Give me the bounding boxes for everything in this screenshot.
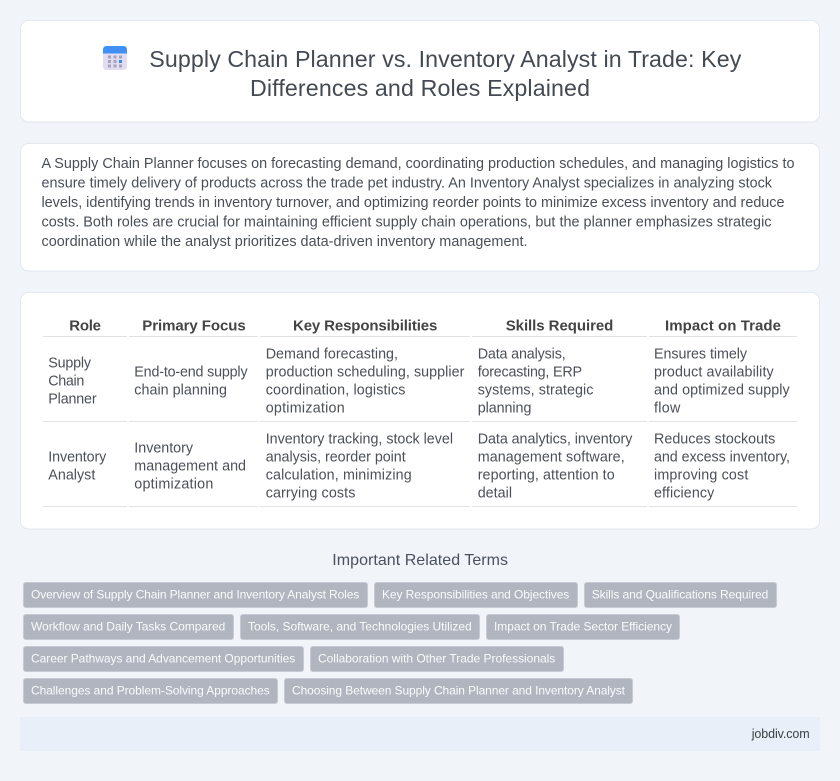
text block: summary: [42, 156, 794, 250]
panel: header: [20, 20, 820, 122]
table row: Inventory Analyst: management and: [134, 458, 246, 474]
table row: Supply Chain Planner: and optimized supply: [654, 382, 791, 398]
table row: Inventory Analyst: calculation, minimizing: [266, 467, 412, 483]
icon: calendar: [103, 46, 127, 70]
table row: Inventory Analyst: optimization: [134, 476, 213, 492]
table row: Supply Chain Planner: Ensures timely: [654, 346, 748, 362]
table row: Supply Chain Planner: product availability: [654, 364, 775, 380]
table row: Supply Chain Planner: Supply: [48, 356, 92, 372]
table row: Supply Chain Planner: Chain: [48, 374, 84, 390]
panel: related term tags: Challenges and Problem-Solving Approaches: [31, 684, 270, 698]
table row: Inventory Analyst: and excess inventory,: [654, 449, 790, 465]
heading: related terms: Important Related Terms: [332, 552, 508, 569]
panel: related term tags: Key Responsibilities and Objectives: [382, 588, 569, 602]
table row: Supply Chain Planner: systems, strategic: [478, 382, 593, 398]
panel: comparison table: [20, 292, 820, 529]
table row: Inventory Analyst: Inventory: [48, 449, 107, 465]
table row: Supply Chain Planner: production scheduling, supplier: [266, 364, 465, 380]
table row: Inventory Analyst: Inventory tracking, stock level: [266, 431, 453, 447]
table header row: [69, 318, 781, 334]
panel: related term tags: Tools, Software, and Technologies Utilized: [248, 620, 472, 634]
panel: related term tags: Overview of Supply Chain Planner and Inventory Analyst Roles: [31, 588, 359, 602]
table header row: Impact on Trade: [665, 318, 781, 334]
table row: Inventory Analyst: [48, 431, 790, 501]
panel: related term tags: Impact on Trade Sector Efficiency: [494, 620, 672, 634]
table row: Supply Chain Planner: optimization: [266, 400, 345, 416]
panel: related term tags: Collaboration with Other Trade Professionals: [318, 652, 555, 666]
panel: related term tags: Skills and Qualifications Required: [592, 588, 768, 602]
table row: Supply Chain Planner: Data analysis,: [478, 346, 566, 362]
panel: related term tags: Career Pathways and Advancement Opportunities: [31, 652, 295, 666]
table row: Supply Chain Planner: flow: [654, 400, 681, 416]
text block: summary: A Supply Chain Planner focuses on forecasting demand, coordinating production schedules, and managing logistics to: [42, 156, 794, 172]
table row: Inventory Analyst: Analyst: [48, 467, 95, 483]
table row: Supply Chain Planner: planning: [478, 400, 531, 416]
table header row: Role: [69, 318, 101, 334]
table row: Supply Chain Planner: Planner: [48, 392, 97, 408]
table row: Inventory Analyst: carrying costs: [266, 485, 355, 501]
table row: Inventory Analyst: efficiency: [654, 485, 715, 501]
title: [149, 46, 742, 101]
title: Supply Chain Planner vs. Inventory Analyst in Trade: Key: [149, 46, 742, 72]
table row: Inventory Analyst: management software,: [478, 449, 625, 465]
footer: [20, 717, 820, 751]
table row: Inventory Analyst: reporting, attention to: [478, 467, 615, 483]
footer: jobdiv.com: [751, 727, 810, 741]
table row: Inventory Analyst: Data analytics, inventory: [478, 431, 633, 447]
panel: related term tags: [24, 582, 776, 704]
table row: Supply Chain Planner: coordination, logistics: [266, 382, 405, 398]
panel: summary paragraph: [20, 144, 820, 271]
table row: Inventory Analyst: analysis, reorder point: [266, 449, 406, 465]
table row: Supply Chain Planner: forecasting, ERP: [478, 364, 582, 380]
table row: Supply Chain Planner: Demand forecasting,: [266, 346, 398, 362]
table header row: Skills Required: [506, 318, 613, 334]
table row: Supply Chain Planner: End-to-end supply: [134, 364, 248, 380]
text block: summary: ensure timely delivery of products across the trade pet industry. An Inventory Analyst specializes in analyzing stock: [42, 176, 773, 192]
text block: summary: coordination while the analyst prioritizes data-driven inventory management.: [42, 234, 528, 250]
panel: related term tags: Choosing Between Supply Chain Planner and Inventory Analyst: [292, 684, 626, 698]
panel: related term tags: Workflow and Daily Tasks Compared: [31, 620, 225, 634]
table header row: Primary Focus: [142, 318, 246, 334]
table row: Inventory Analyst: detail: [478, 485, 512, 501]
table header row: Key Responsibilities: [293, 318, 437, 334]
table row: Inventory Analyst: Reduces stockouts: [654, 431, 775, 447]
table row: Inventory Analyst: Inventory: [134, 440, 194, 456]
text block: summary: costs. Both roles are crucial for maintaining efficient supply chain operations, but the planner emphasizes strategic: [42, 214, 772, 230]
table row: Supply Chain Planner: chain planning: [134, 382, 227, 398]
table row: Inventory Analyst: improving cost: [654, 467, 748, 483]
title: Differences and Roles Explained: [250, 75, 590, 101]
text block: summary: levels, identifying trends in inventory turnover, and optimizing reorder points to minimize excess inventory and reduce: [42, 195, 784, 211]
table row: Supply Chain Planner: [48, 346, 791, 416]
